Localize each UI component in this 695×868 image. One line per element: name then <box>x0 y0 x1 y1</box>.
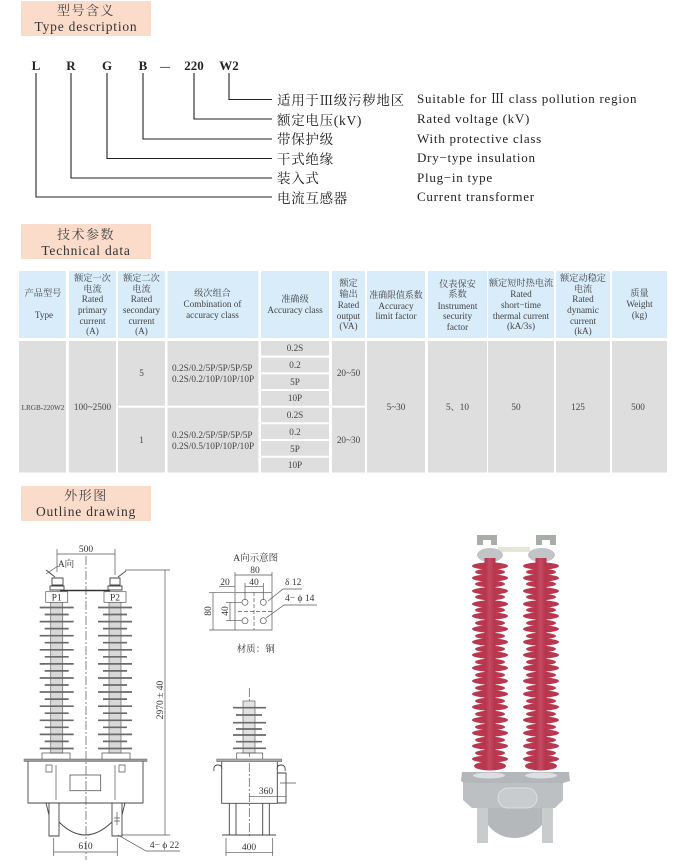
table body cells: 1 <box>139 435 144 445</box>
heading: type description: Type description <box>35 19 137 34</box>
table body cells: 5P <box>290 444 300 454</box>
table header row: secondary <box>123 305 161 315</box>
table body cells: 0.2S/0.2/5P/5P/5P/5P <box>172 364 253 374</box>
side dimensions <box>226 783 296 856</box>
table header row: (kg) <box>632 310 647 320</box>
table header row: 电流 <box>574 283 592 294</box>
plate dimensions: δ 12 <box>285 578 302 588</box>
table header row: 输出 <box>339 288 358 299</box>
model code letters: G <box>102 58 112 73</box>
table header row: Rated <box>510 289 532 299</box>
english meanings: Current transformer <box>417 189 535 204</box>
table body cells: 5~30 <box>387 402 406 412</box>
tank base <box>461 772 570 843</box>
side insulator <box>233 701 266 753</box>
chinese meanings: 额定电压(kV) <box>277 112 362 128</box>
A-direction detail drawing <box>204 552 317 655</box>
table body cells: 5、10 <box>446 402 469 412</box>
english meanings: Plug−in type <box>417 170 493 185</box>
table header row: current <box>570 316 596 326</box>
table header row: current <box>128 316 155 326</box>
model code letters: R <box>66 58 76 73</box>
table header row: Rated <box>131 294 153 304</box>
center line <box>85 556 87 860</box>
table header row: 额定二次 <box>123 272 160 283</box>
table body cells: 100~2500 <box>74 402 111 412</box>
top fixtures <box>477 535 556 562</box>
plate dimensions: 4− ϕ 14 <box>285 594 315 604</box>
heading: outline drawing: 外形图 <box>64 488 108 503</box>
table header row: 额定动稳定 <box>560 272 606 283</box>
dimension lines: 500 <box>79 545 93 555</box>
heading: outline drawing <box>21 486 151 521</box>
side dimensions: 360 <box>259 787 273 797</box>
table body cells: 0.2S <box>287 343 303 353</box>
english meanings: Rated voltage (kV) <box>417 111 530 126</box>
table body cells: 0.2S/0.5/10P/10P/10P <box>172 442 254 452</box>
table body cells: 500 <box>631 402 645 412</box>
model code letters: — <box>159 62 171 73</box>
english meanings: Dry−type insulation <box>417 150 536 165</box>
table body cells: 20~50 <box>337 368 361 378</box>
chinese meanings: 干式绝缘 <box>277 152 334 167</box>
heading: technical data: Technical data <box>41 243 131 258</box>
table header row: limit factor <box>375 311 417 321</box>
plate dimensions: 80 <box>204 606 214 616</box>
insulator column P1 <box>40 602 74 753</box>
table body cells: 0.2 <box>289 427 301 437</box>
table header row: 产品型号 <box>25 287 61 298</box>
table header row: 额定一次 <box>74 272 111 283</box>
side dimensions: 400 <box>242 843 256 853</box>
table body cells: LRGB-220W2 <box>22 404 65 412</box>
table body cells: 10P <box>288 393 302 403</box>
side tank and legs <box>214 753 286 835</box>
dimension lines: 610 <box>78 842 93 852</box>
chinese meanings: 适用于Ⅲ级污秽地区 <box>277 92 405 108</box>
heading: outline drawing: Outline drawing <box>36 504 136 519</box>
plate dimensions: 40 <box>249 578 259 588</box>
table header row: Instrument <box>438 301 478 311</box>
table header row: 仪表保安 <box>439 278 477 289</box>
insulator column P2 <box>98 602 132 753</box>
table header row: Accuracy <box>378 301 414 311</box>
heading: type description: 型号含义 <box>57 3 115 18</box>
table header row: current <box>79 316 106 326</box>
terminals P1 and P2 <box>46 570 126 604</box>
table header row: (A) <box>86 326 99 336</box>
table body cells: 0.2 <box>289 360 301 370</box>
table body cells: 10P <box>288 460 302 470</box>
table header row: primary <box>78 305 107 315</box>
table header row: (kA) <box>574 326 592 336</box>
table header row: factor <box>447 322 468 332</box>
english meanings: Suitable for Ⅲ class pollution region <box>417 91 637 106</box>
heading: type description <box>21 1 151 36</box>
plate dimensions: 20 <box>220 578 230 588</box>
table header row: Accuracy class <box>267 305 323 315</box>
plate dimensions: 80 <box>250 566 260 576</box>
table body cells: 0.2S <box>287 410 303 420</box>
table body cells: 0.2S/0.2/5P/5P/5P/5P <box>172 431 253 441</box>
table header row: Combination of <box>184 299 242 309</box>
table header row: 额定 <box>339 277 358 288</box>
table body cells: 5 <box>139 368 144 378</box>
technical data table <box>19 271 667 472</box>
table body cells <box>19 341 667 472</box>
A-direction detail drawing: A向示意图 <box>233 552 278 564</box>
table header row: output <box>337 311 361 321</box>
table body cells: 0.2S/0.2/10P/10P/10P <box>172 375 254 385</box>
table header row: Type <box>35 310 53 320</box>
table header row: (VA) <box>339 321 358 331</box>
model code letters: B <box>139 58 148 73</box>
table header row: dynamic <box>567 305 599 315</box>
dimension lines: 4− ϕ 22 <box>150 841 179 851</box>
table header row: 质量 <box>630 287 649 298</box>
material note: 材质：铜 <box>237 643 275 655</box>
table header row: Rated <box>82 294 104 304</box>
terminals P1 and P2: P1 <box>52 594 62 604</box>
table body cells: 20~30 <box>337 435 361 445</box>
english meanings: With protective class <box>417 131 542 146</box>
table header row: Rated <box>338 300 360 310</box>
heading: technical data: 技术参数 <box>57 227 115 242</box>
table header row: 电流 <box>132 283 151 294</box>
table header row: Rated <box>572 294 594 304</box>
plate dimensions: 40 <box>221 606 231 616</box>
table header row: (A) <box>135 326 148 336</box>
dimension lines <box>46 545 180 856</box>
table body cells: 50 <box>511 402 521 412</box>
table header row: security <box>443 311 472 321</box>
table header row: (kA/3s) <box>507 321 535 331</box>
table header row: 级次组合 <box>194 287 231 298</box>
terminals P1 and P2: P2 <box>110 594 120 604</box>
leader lines <box>36 73 272 197</box>
model code letters: 220 <box>184 58 204 73</box>
table header row: 额定短时热电流 <box>489 277 553 288</box>
table header row: 系数 <box>448 288 467 299</box>
product photo <box>461 535 570 843</box>
table header row: thermal current <box>493 311 550 321</box>
mounting plate with four holes <box>235 592 272 630</box>
table body cells: 5P <box>290 377 300 387</box>
chinese meanings: 带保护级 <box>277 131 334 147</box>
type code diagram <box>32 58 637 206</box>
right red insulator <box>523 558 559 770</box>
model code letters <box>32 58 239 73</box>
tank body and feet <box>24 753 147 836</box>
table header row: Weight <box>626 299 653 309</box>
chinese meanings: 装入式 <box>277 170 320 186</box>
heading: technical data <box>21 224 151 259</box>
front outline drawing <box>24 545 180 860</box>
table header row: accuracy class <box>186 310 239 320</box>
table header row: 准确限值系数 <box>369 289 423 300</box>
table header row <box>19 271 667 338</box>
model code letters: W2 <box>219 58 239 73</box>
dimension lines: A向 <box>58 558 74 570</box>
table header row: 准确级 <box>281 293 309 304</box>
chinese meanings: 电流互感器 <box>277 190 348 206</box>
left red insulator <box>472 558 508 770</box>
dimension lines: 2970 ± 40 <box>156 681 166 719</box>
table body cells: 125 <box>571 402 585 412</box>
model code letters: L <box>32 58 41 73</box>
side outline drawing <box>214 688 296 856</box>
table header row: short−time <box>501 300 541 310</box>
english meanings <box>417 91 637 204</box>
table header row: 电流 <box>83 283 102 294</box>
chinese meanings <box>277 92 405 206</box>
plate dimensions <box>204 566 317 630</box>
